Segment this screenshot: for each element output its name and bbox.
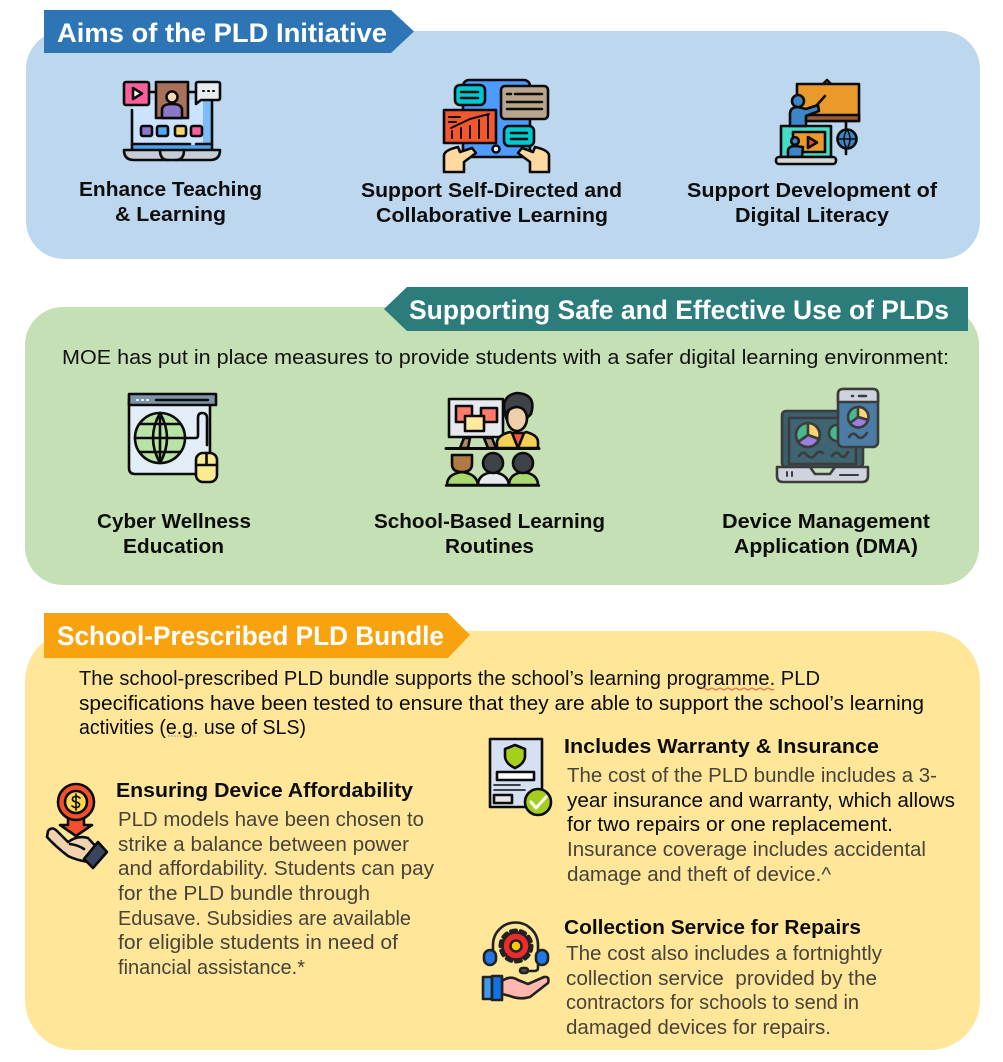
- icon: repair service gear and hand: [483, 922, 548, 1000]
- text: enhance teaching and learning: [79, 178, 262, 226]
- panel: aims of the PLD initiative: [26, 10, 980, 259]
- text: collection service for repairs: damaged devices for repairs.: [566, 1016, 831, 1039]
- text: collection service for repairs: [564, 916, 883, 1039]
- icon: browser window with globe and mouse: [129, 394, 217, 482]
- text: support self-directed and collaborative learning: [361, 179, 622, 227]
- panel: supporting safe and effective use: [25, 287, 979, 585]
- text: cyber wellness education: Cyber Wellness: [97, 510, 251, 533]
- text: bundle introduction: [79, 667, 924, 739]
- icon: laptop with video lesson: [124, 82, 220, 160]
- text: enhance teaching and learning: & Learning: [115, 203, 226, 226]
- text: cyber wellness education: Education: [123, 535, 224, 558]
- text: ensuring device affordability: [116, 779, 435, 979]
- icon: teacher presenting to students: [446, 393, 539, 486]
- text: includes warranty and insurance: for two repairs or one replacement.: [567, 813, 893, 836]
- heading: PLD bundle banner: School-Prescribed PLD Bundle: [57, 621, 444, 651]
- text: device management application: [722, 510, 930, 558]
- text: support development of digital literacy: [687, 179, 937, 227]
- text: bundle introduction: The school-prescribed PLD bundle supports the school’s learning programme. PLD: [79, 667, 820, 690]
- icon: warranty document with shield: [490, 739, 551, 815]
- heading: aims banner: [44, 10, 414, 53]
- text: support development of digital literacy: Support Development of: [687, 179, 937, 202]
- text: collection service for repairs: collection service provided by the: [566, 967, 877, 990]
- text: ensuring device affordability: PLD models have been chosen to: [118, 808, 424, 831]
- icon: teacher presenting with laptop: [776, 80, 859, 164]
- text: collection service for repairs: Collection Service for Repairs: [564, 916, 861, 939]
- text: includes warranty and insurance: damage and theft of device.^: [567, 863, 831, 886]
- text: ensuring device affordability: strike a balance between power: [118, 833, 409, 856]
- text: bundle introduction: specifications have been tested to ensure that they are able to support the school’s learning: [79, 692, 924, 715]
- text: includes warranty and insurance: Insurance coverage includes accidental: [567, 838, 926, 861]
- text: includes warranty and insurance: year insurance and warranty, which allows: [567, 789, 955, 812]
- heading: PLD bundle banner: [44, 613, 470, 658]
- text: collection service for repairs: contractors for schools to send in: [566, 991, 859, 1014]
- text: ensuring device affordability: financial assistance.*: [118, 956, 305, 979]
- text: enhance teaching and learning: Enhance Teaching: [79, 178, 262, 201]
- icon: money and hand: [47, 784, 107, 868]
- text: ensuring device affordability: Edusave. Subsidies are available: [118, 907, 411, 930]
- text: support self-directed and collaborative learning: Collaborative Learning: [376, 204, 608, 227]
- text: school-based learning routines: School-Based Learning: [374, 510, 605, 533]
- icon: device management laptop and phone: [777, 389, 878, 482]
- text: school-based learning routines: [374, 510, 605, 558]
- text: includes warranty and insurance: [564, 735, 955, 886]
- text: collection service for repairs: The cost also includes a fortnightly: [566, 942, 883, 965]
- text: cyber wellness education: [97, 510, 251, 558]
- text: device management application: Application (DMA): [734, 535, 918, 558]
- text: ensuring device affordability: for eligible students in need of: [118, 931, 398, 954]
- heading: safe and effective banner: [384, 287, 968, 331]
- text: ensuring device affordability: and affordability. Students can pay: [118, 857, 435, 880]
- text: MOE measures intro: MOE has put in place measures to provide students with a safer digital learning environment:: [62, 346, 949, 369]
- text: support development of digital literacy: Digital Literacy: [735, 204, 890, 227]
- text: school-based learning routines: Routines: [445, 535, 534, 558]
- heading: safe and effective banner: Supporting Safe and Effective Use of PLDs: [409, 295, 949, 325]
- text: device management application: Device Management: [722, 510, 930, 533]
- icon: tablet with collaborative content: [444, 80, 549, 172]
- heading: aims banner: Aims of the PLD Initiative: [57, 18, 387, 48]
- text: ensuring device affordability: for the PLD bundle through: [118, 882, 370, 905]
- panel: school-prescribed PLD bundle: [25, 613, 980, 1050]
- text: includes warranty and insurance: The cost of the PLD bundle includes a 3-: [567, 764, 937, 787]
- text: bundle introduction: activities (e.g. use of SLS): [79, 716, 306, 739]
- text: ensuring device affordability: Ensuring Device Affordability: [116, 779, 414, 802]
- text: support self-directed and collaborative learning: Support Self-Directed and: [361, 179, 622, 202]
- text: includes warranty and insurance: Includes Warranty & Insurance: [564, 735, 879, 758]
